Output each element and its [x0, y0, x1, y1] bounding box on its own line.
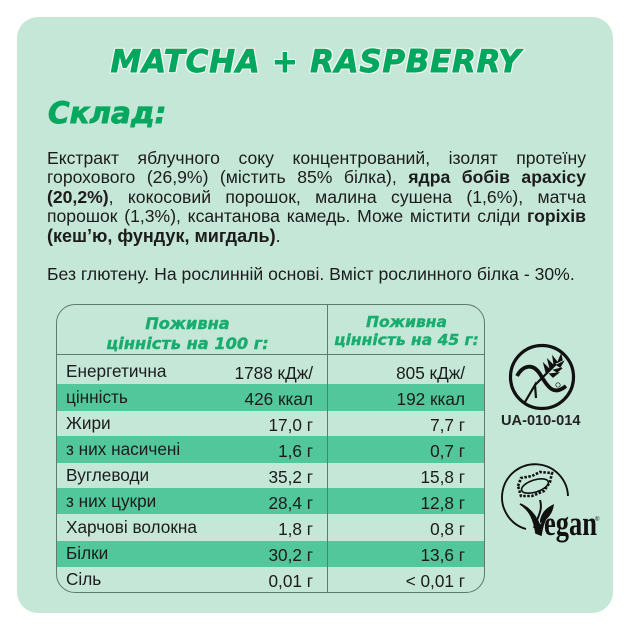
- table rows: з них насичені: [66, 439, 180, 459]
- column header: per 100 g: [106, 314, 269, 352]
- table rows: з них цукри: [66, 491, 156, 511]
- ingredients text: Екстракт яблучного соку концентрований, ізолят протеїну: [47, 148, 586, 168]
- table rows: 1788 кДж/: [235, 363, 313, 383]
- nutrition table: [56, 304, 485, 593]
- table rows: Сіль: [66, 569, 101, 589]
- table rows: < 0,01 г: [406, 571, 465, 591]
- icon: gluten free: [501, 344, 581, 429]
- table rows: Білки: [66, 543, 108, 563]
- table rows: 15,8 г: [420, 467, 465, 487]
- column header: per 45 g: Поживна: [366, 312, 447, 330]
- ingredients text: Без глютену. На рослинній основі. Вміст рослинного білка - 30%.: [47, 264, 575, 284]
- icon: vegan: [501, 463, 600, 543]
- column header: per 100 g: цінність на 100 г:: [106, 334, 269, 352]
- column header: per 45 g: [334, 312, 479, 349]
- title: MATCHA + RASPBERRY: [111, 44, 524, 80]
- ingredients text: (кеш’ю, фундук, мигдаль).: [47, 226, 281, 246]
- table rows: 35,2 г: [268, 467, 313, 487]
- table rows: Енергетична: [66, 360, 166, 380]
- table rows: Вуглеводи: [66, 465, 149, 485]
- table rows: 0,7 г: [430, 441, 465, 461]
- table rows: 28,4 г: [268, 493, 313, 513]
- table rows: Жири: [66, 413, 111, 433]
- ingredients text: (20,2%), кокосовий порошок, малина сушена (1,6%), матча: [47, 186, 586, 206]
- column header: per 100 g: Поживна: [145, 314, 230, 333]
- table rows: 17,0 г: [268, 415, 313, 435]
- table rows: 30,2 г: [268, 545, 313, 565]
- table rows: 0,01 г: [268, 571, 313, 591]
- table rows: 192 ккал: [397, 388, 465, 408]
- table rows: 0,8 г: [430, 519, 465, 539]
- heading: composition: Склад:: [48, 96, 166, 130]
- icon: vegan: ®: [595, 516, 600, 523]
- table rows: 7,7 г: [430, 415, 465, 435]
- table rows: Харчові волокна: [66, 517, 197, 537]
- table rows: 426 ккал: [245, 388, 313, 408]
- table rows: цінність: [66, 387, 128, 407]
- table rows: 12,8 г: [420, 493, 465, 513]
- ingredients text: горохового (26,9%) (містить 85% білка), ядра бобів арахісу: [47, 167, 586, 187]
- table rows: [66, 360, 465, 591]
- table rows: 13,6 г: [420, 545, 465, 565]
- icon: gluten free: UA-010-014: [501, 413, 581, 429]
- column header: per 45 g: цінність на 45 г:: [334, 331, 479, 349]
- ingredients text: порошок (1,3%), ксантанова камедь. Може містити сліди горіхів: [47, 206, 586, 226]
- table rows: 1,6 г: [278, 441, 313, 461]
- table rows: 805 кДж/: [396, 363, 465, 383]
- table rows: 1,8 г: [278, 519, 313, 539]
- ingredients text: [47, 148, 586, 284]
